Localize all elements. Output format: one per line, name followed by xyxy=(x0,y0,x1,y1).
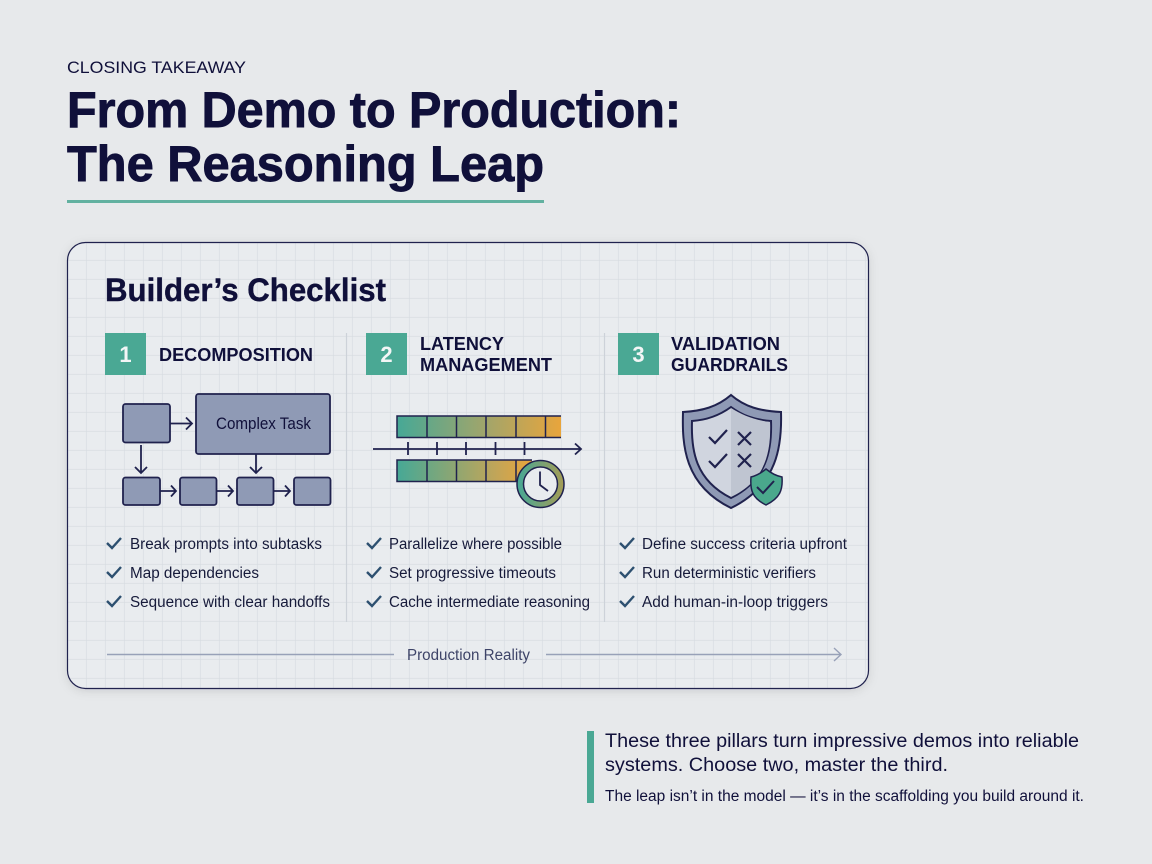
number badge 3: 3 xyxy=(632,342,645,367)
icon: shield with checks and crosses xyxy=(683,395,782,508)
heading: validation guardrails: VALIDATION xyxy=(671,333,780,354)
checklist: decomposition: Sequence with clear handoffs xyxy=(130,594,330,611)
checklist: latency management: Set progressive timeouts xyxy=(389,565,556,582)
arrow: production reality xyxy=(107,647,841,664)
heading: latency management: MANAGEMENT xyxy=(420,354,553,375)
title: The Reasoning Leap xyxy=(67,136,544,192)
checklist: decomposition: Break prompts into subtasks xyxy=(130,536,322,553)
number badge 3 xyxy=(618,333,659,375)
checklist: validation guardrails: Run deterministic verifiers xyxy=(642,565,816,582)
heading: latency management: LATENCY xyxy=(420,333,505,354)
checklist: decomposition: Map dependencies xyxy=(130,565,259,582)
heading: validation guardrails xyxy=(671,333,788,375)
column 2: latency management xyxy=(366,333,590,611)
eyebrow label: CLOSING TAKEAWAY xyxy=(67,58,246,77)
number badge 1: 1 xyxy=(119,342,132,367)
checklist: validation guardrails: Define success criteria upfront xyxy=(642,536,848,553)
callout main text: systems. Choose two, master the third. xyxy=(605,755,948,776)
column 3: validation guardrails xyxy=(618,333,848,611)
arrow: production reality: Production Reality xyxy=(407,647,530,664)
checklist: latency management: Cache intermediate reasoning xyxy=(389,594,590,611)
number badge 2 xyxy=(366,333,407,375)
callout secondary text: The leap isn’t in the model — it’s in the scaffolding you build around it. xyxy=(605,788,1084,805)
diagram: task decomposition flow xyxy=(123,394,330,505)
number badge 2: 2 xyxy=(380,342,393,367)
number badge 1 xyxy=(105,333,146,375)
heading: latency management xyxy=(420,333,553,375)
checklist: validation guardrails xyxy=(620,536,848,611)
panel: builder's checklist xyxy=(68,242,868,688)
checklist: decomposition xyxy=(107,536,330,611)
title: From Demo to Production: xyxy=(67,82,681,138)
callout xyxy=(587,731,1084,805)
diagram: task decomposition flow: Complex Task xyxy=(216,414,311,433)
panel background xyxy=(68,242,868,688)
icon: small green shield xyxy=(751,469,782,505)
callout main text xyxy=(605,731,1079,776)
heading: decomposition: DECOMPOSITION xyxy=(159,344,313,365)
title underline xyxy=(67,200,544,203)
title xyxy=(67,82,681,192)
checklist: validation guardrails: Add human-in-loop triggers xyxy=(642,594,828,611)
diagram: latency timeline with clock xyxy=(373,416,581,508)
panel heading: Builder’s Checklist xyxy=(105,272,386,308)
checklist: latency management xyxy=(367,536,590,611)
callout accent bar xyxy=(587,731,594,803)
checklist: latency management: Parallelize where possible xyxy=(389,536,562,553)
heading: validation guardrails: GUARDRAILS xyxy=(671,354,788,375)
column 1: decomposition xyxy=(105,333,330,611)
callout main text: These three pillars turn impressive demos into reliable xyxy=(605,731,1079,752)
